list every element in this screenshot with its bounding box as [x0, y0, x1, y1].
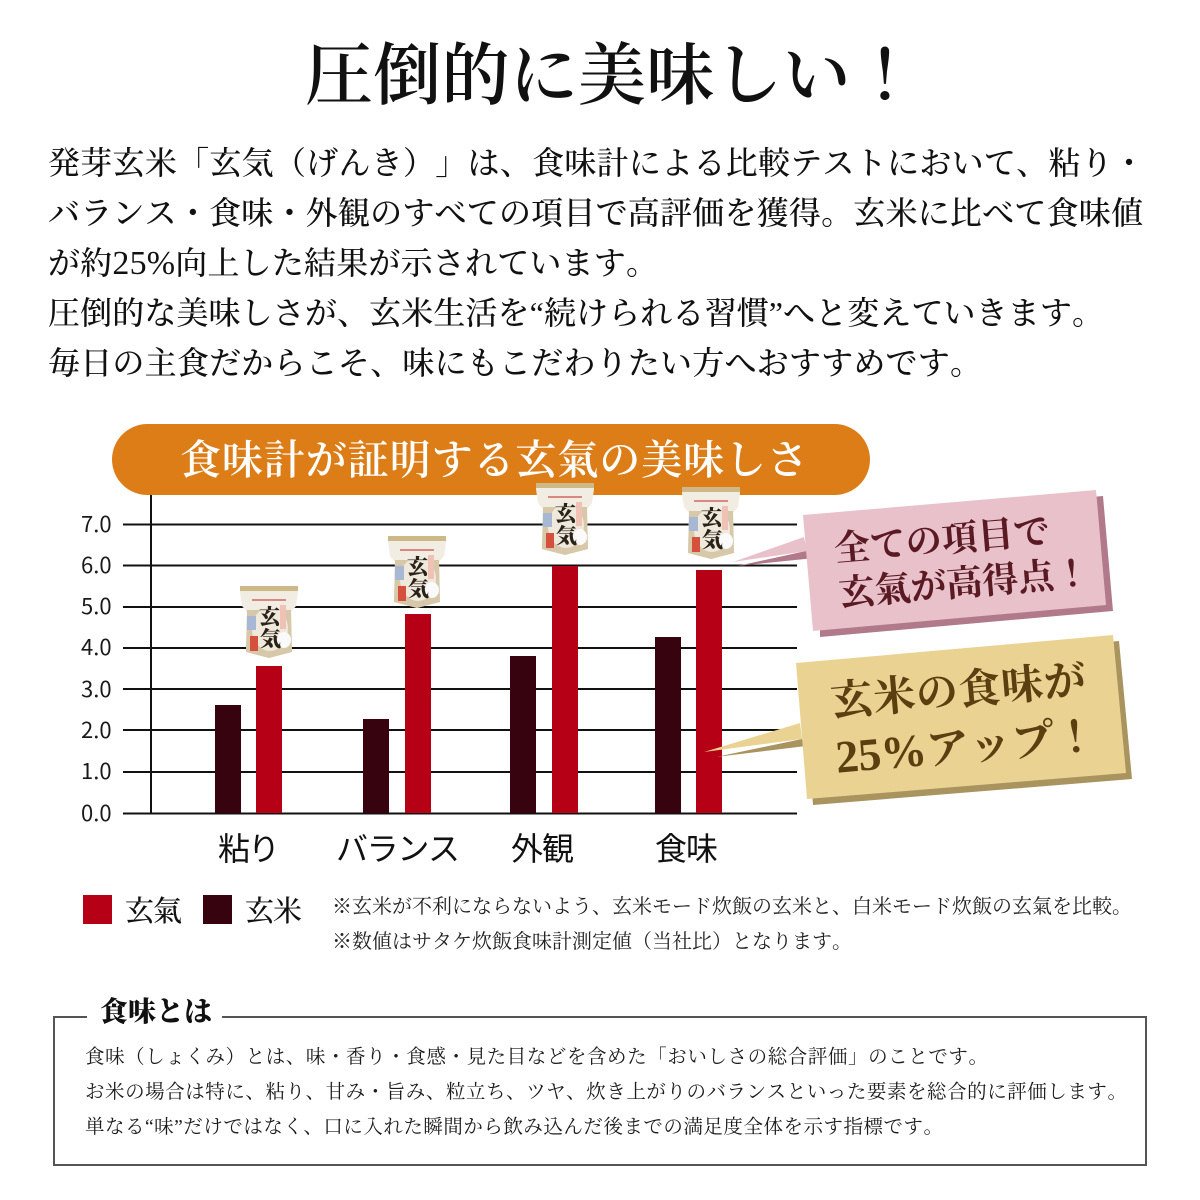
y axis labels: 5.0: [81, 589, 112, 621]
icon: rice bag 3: [536, 483, 594, 555]
bar chart: [81, 495, 797, 870]
icon: rice bag 4: 玄: [701, 506, 724, 530]
legend: 玄米: [245, 895, 302, 928]
panel heading: 食味とは: [100, 996, 212, 1028]
icon: rice bag 2: 気: [408, 577, 429, 601]
y axis labels: 0.0: [81, 796, 112, 828]
chart heading banner: [112, 424, 870, 495]
callout: yellow, 25% up: 25%アップ！: [833, 709, 1099, 783]
panel text: お米の場合は特に、粘り、甘み・旨み、粒立ち、ツヤ、炊き上がりのバランスといった要素を総合的に評価します。: [85, 1081, 1127, 1103]
legend: [83, 895, 302, 928]
bars: バランス: [363, 614, 431, 813]
icon: rice bag 4: [682, 487, 740, 559]
callout: pink, all items high score: 全ての項目で: [832, 511, 1051, 569]
bars: 外観: [510, 566, 578, 813]
title: 圧倒的に美味しい！: [305, 38, 919, 114]
intro text block: が約25%向上した結果が示されています。: [48, 245, 658, 282]
intro text block: バランス・食味・外観のすべての項目で高評価を獲得。玄米に比べて食味値: [48, 195, 1143, 231]
panel text: [85, 1046, 1127, 1138]
y axis labels: 2.0: [81, 713, 112, 745]
panel text: 食味（しょくみ）とは、味・香り・食感・見た目などを含めた「おいしさの総合評価」のことです。: [85, 1046, 988, 1068]
bars: 粘り: [215, 666, 282, 813]
intro text block: 毎日の主食だからこそ、味にもこだわりたい方へおすすめです。: [48, 345, 982, 381]
footnotes: ※玄米が不利にならないよう、玄米モード炊飯の玄米と、白米モード炊飯の玄氣を比較。: [332, 895, 1132, 918]
icon: rice bag 1: 玄: [259, 605, 282, 629]
icon: rice bag 2: 玄: [407, 555, 430, 579]
category labels: 食味: [655, 824, 718, 870]
icon: rice bag 3: 気: [556, 524, 577, 548]
y axis labels: 7.0: [81, 507, 112, 539]
icon: rice bag 1: 気: [260, 627, 281, 651]
y axis labels: 3.0: [81, 672, 112, 704]
chart grid and axis: [123, 495, 797, 814]
panel text: 単なる“味”だけではなく、口に入れた瞬間から飲み込んだ後までの満足度全体を示す指標です。: [85, 1116, 943, 1138]
icon: rice bag 2: [388, 536, 446, 608]
bars: 食味: [655, 570, 722, 813]
category labels: 粘り: [218, 824, 280, 870]
intro text block: 圧倒的な美味しさが、玄米生活を“続けられる習慣”へと変えていきます。: [48, 295, 1104, 331]
chart heading banner: 食味計が証明する玄氣の美味しさ: [180, 437, 808, 483]
footnotes: [332, 895, 1132, 953]
y axis labels: 1.0: [81, 754, 112, 786]
intro text block: [48, 145, 1145, 381]
category labels: 外観: [511, 824, 574, 870]
callout: yellow, 25% up: 玄米の食味が: [829, 657, 1088, 726]
icon: rice bag 3: 玄: [555, 502, 578, 526]
icon: rice bag 4: 気: [702, 528, 723, 552]
category labels: バランス: [336, 824, 460, 870]
intro text block: 発芽玄米「玄気（げんき）」は、食味計による比較テストにおいて、粘り・: [48, 145, 1145, 181]
legend: 玄氣: [125, 895, 182, 928]
callout: pink, all items high score: [733, 490, 1113, 637]
y axis labels: 4.0: [81, 630, 112, 662]
footnotes: ※数値はサタケ炊飯食味計測定値（当社比）となります。: [332, 930, 852, 953]
callout: pink, all items high score: 玄氣が高得点！: [837, 553, 1092, 614]
y axis labels: 6.0: [81, 548, 112, 580]
panel: definition of 食味: [54, 996, 1146, 1165]
icon: rice bag 1: [240, 586, 298, 658]
callout: yellow, 25% up: [704, 635, 1132, 805]
y axis labels: [81, 507, 112, 828]
category labels: [218, 824, 718, 870]
